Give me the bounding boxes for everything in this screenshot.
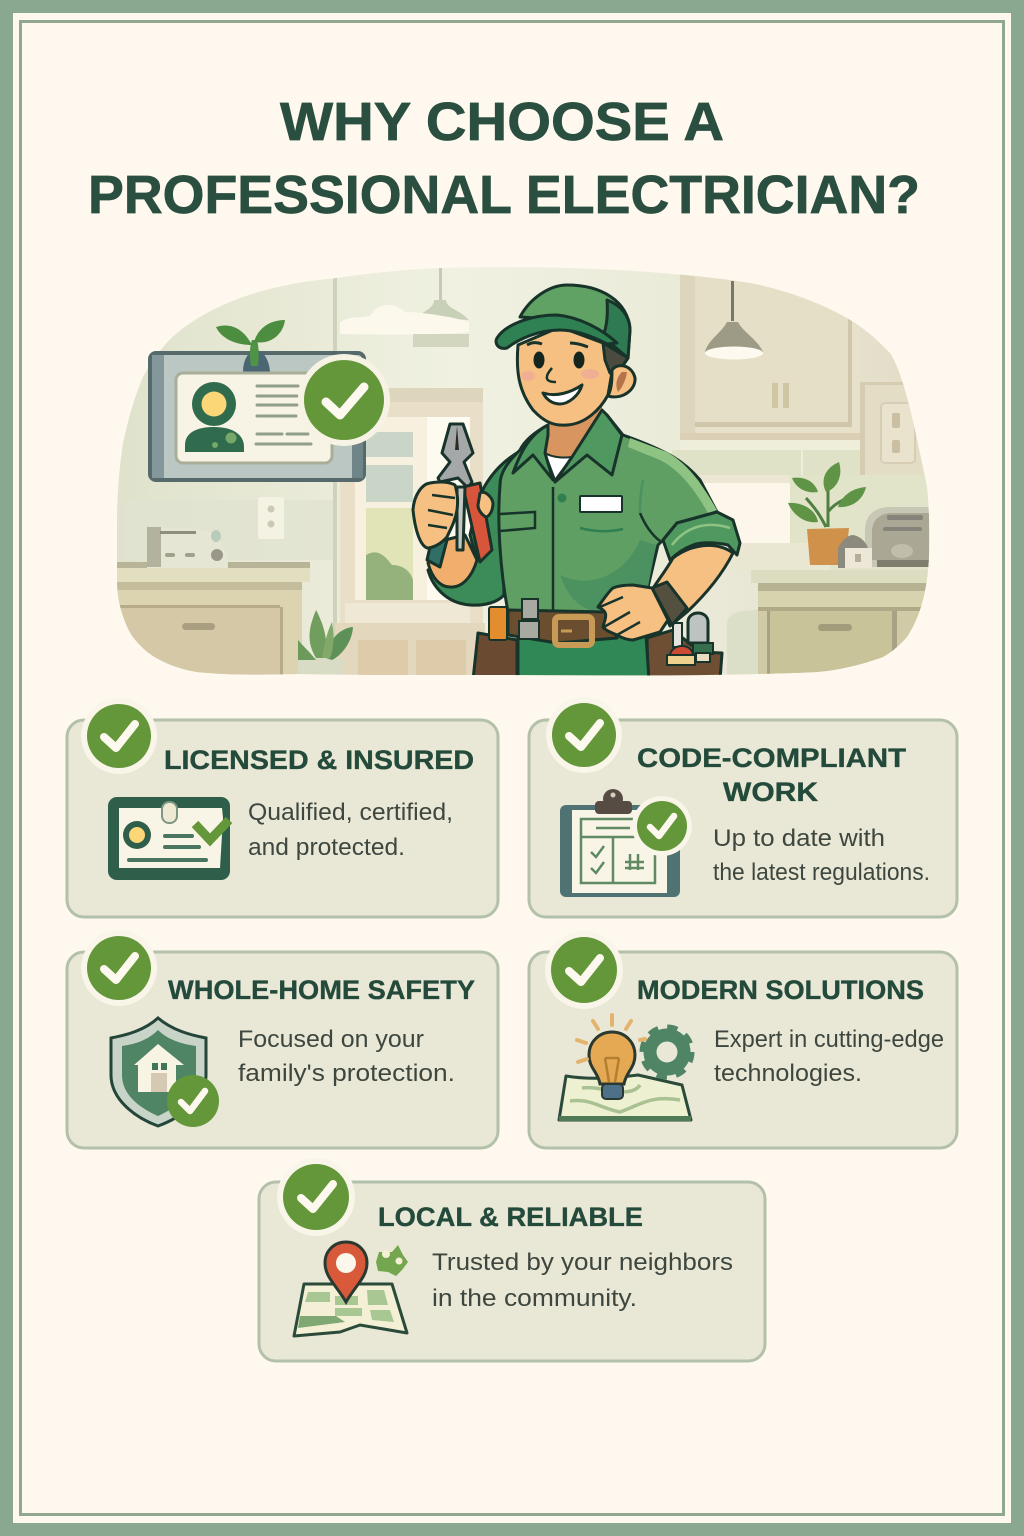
potted plant [788, 462, 866, 565]
text: family's protection. [238, 1060, 455, 1087]
fist [413, 482, 493, 548]
heading: LOCAL & RELIABLE [378, 1202, 643, 1232]
title: WHY CHOOSE A [280, 92, 724, 152]
panel: code-compliant work [529, 697, 957, 917]
icon: bulb, gear and map [559, 1015, 691, 1121]
text: the latest regulations. [713, 859, 930, 886]
collar [513, 410, 622, 482]
left forearm skin [428, 535, 477, 587]
text: Trusted by your neighbors [432, 1249, 733, 1276]
window [340, 388, 483, 623]
panel: local and reliable [259, 1158, 765, 1361]
pants [516, 637, 650, 676]
small wall outlet [258, 497, 284, 539]
right toaster [865, 507, 929, 567]
panel: licensed and insured [67, 698, 498, 917]
right wall outlet [860, 382, 919, 475]
text [713, 825, 930, 886]
hero illustration: kitchen scene [110, 260, 935, 681]
house-shaped socket [838, 535, 872, 568]
shirt torso [499, 415, 717, 612]
cap [496, 285, 630, 358]
pliers [427, 424, 492, 567]
icon: shield with house [111, 1018, 219, 1127]
belt [489, 599, 617, 645]
electrician [413, 285, 740, 680]
left toaster [147, 527, 228, 568]
text [238, 1026, 455, 1087]
floor plant [298, 610, 353, 678]
check badge [81, 930, 157, 1006]
text: Qualified, certified, [248, 799, 453, 826]
text: in the community. [432, 1285, 637, 1312]
panel: whole-home safety [67, 930, 498, 1148]
text: and protected. [248, 834, 405, 861]
text [248, 799, 453, 861]
verified badge [298, 354, 390, 446]
left ceiling lamp [340, 268, 469, 347]
check badge [545, 931, 623, 1009]
right pouch [647, 613, 722, 680]
title: PROFESSIONAL ELECTRICIAN? [88, 165, 920, 225]
lower wall cabinets [335, 623, 485, 680]
text: Focused on your [238, 1026, 424, 1053]
id photo [185, 382, 244, 452]
icon: clipboard [560, 789, 692, 897]
sprout on display [216, 320, 285, 372]
panel: modern solutions [529, 931, 957, 1148]
head [517, 327, 635, 425]
id text lines [256, 386, 311, 444]
left pouch [473, 633, 517, 680]
text [714, 1026, 944, 1087]
check badge [277, 1158, 355, 1236]
icon: id card [108, 797, 230, 880]
text [432, 1249, 733, 1312]
neck and undershirt [545, 405, 602, 480]
shirt details [500, 438, 717, 610]
right sleeve and forearm [598, 512, 740, 640]
upper cabinet and pendant lamp [680, 270, 860, 450]
kitchen background [110, 260, 935, 681]
text: Up to date with [713, 825, 885, 852]
backsplash and right counter [670, 450, 930, 681]
text: technologies. [714, 1060, 862, 1087]
heading: WHOLE-HOME SAFETY [168, 975, 475, 1005]
heading: WORK [723, 777, 819, 807]
check badge [546, 697, 622, 773]
check badge [81, 698, 157, 774]
left sleeve [428, 450, 522, 605]
id card display [150, 320, 390, 480]
left counter [116, 562, 310, 678]
title [88, 92, 920, 225]
heading: MODERN SOLUTIONS [637, 975, 924, 1005]
heading: LICENSED & INSURED [164, 745, 474, 775]
text: Expert in cutting-edge [714, 1026, 944, 1053]
icon: map pin [294, 1242, 408, 1336]
heading [637, 743, 907, 807]
heading: CODE-COMPLIANT [637, 743, 907, 773]
